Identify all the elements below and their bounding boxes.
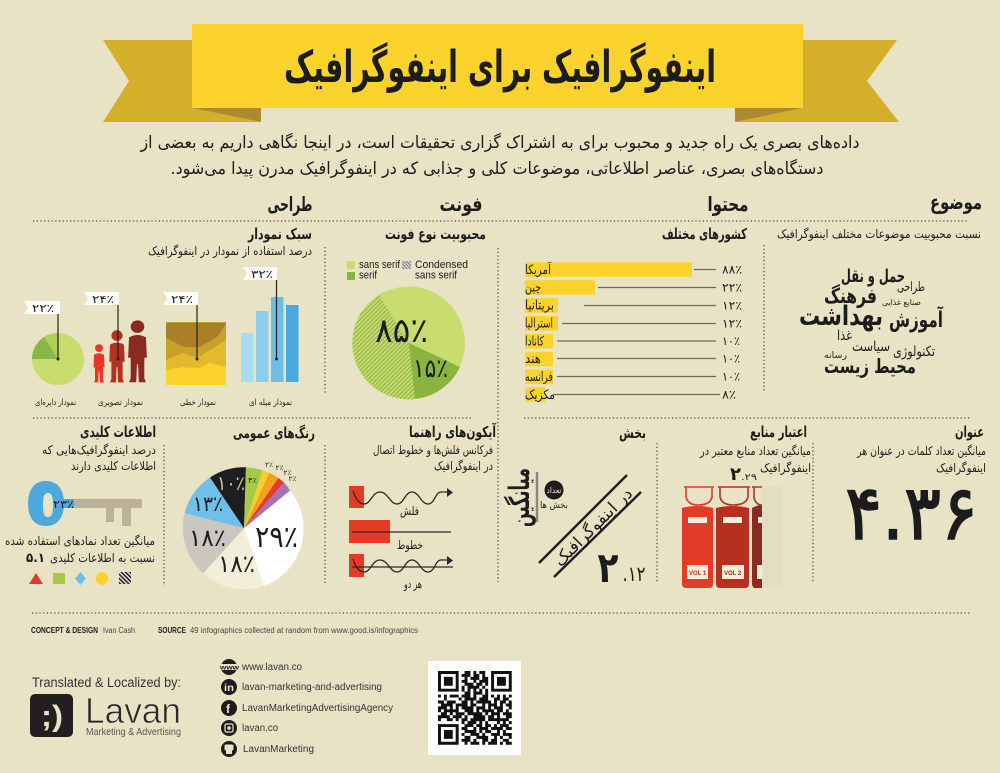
colours pie chart: ۱۸٪ (189, 524, 226, 552)
translator logo (30, 675, 181, 738)
title: اینفوگرافیک برای اینفوگرافیک (284, 41, 716, 93)
line example (349, 520, 451, 553)
font pie chart (352, 286, 465, 400)
website link (219, 659, 302, 675)
word cloud: صنایع غذایی (882, 298, 921, 307)
guide icons description: فرکانس فلش‌ها و خطوط اتصال (373, 443, 493, 458)
average symbols text: ۵.۱ (26, 551, 45, 566)
panel: chart style (24, 225, 312, 408)
intro paragraph: دستگاه‌های بصری، عناصر اطلاعاتی، موضوعات کلی و جذابی که در اینفوگرافیک مدرن پیدا می‌شود. (170, 158, 824, 179)
pictogram chart icon: ۲۴٪ (92, 293, 114, 306)
font pie chart: ۱۵٪ (413, 354, 448, 384)
panel: guide icons (349, 423, 497, 592)
font legend (347, 259, 468, 282)
country percentages: ۸٪ (722, 388, 736, 402)
area chart icon: ۲۴٪ (171, 293, 193, 306)
icon: books: VOL 1 (689, 571, 707, 577)
word cloud: بهداشت (799, 301, 883, 332)
font legend: serif (359, 270, 378, 282)
title banner (103, 24, 899, 122)
both example (349, 554, 453, 592)
rotated word average: میانگین (503, 468, 536, 527)
logo mark (30, 694, 73, 737)
title words description: اینفوگرافیک (936, 461, 986, 476)
colours pie chart: ۲٪ (265, 461, 273, 469)
translator logo: Translated & Localized by: (32, 675, 181, 690)
country percentages (722, 262, 742, 402)
bar chart icon: نمودار میله ای (249, 398, 292, 408)
word cloud: سیاست (852, 339, 890, 355)
heading: font: فونت (440, 192, 482, 216)
guide icons description: در اینفوگرافیک (434, 459, 493, 474)
colours pie chart: ۲۹٪ (255, 520, 298, 555)
sections heading: بخش (619, 424, 646, 442)
instagram link (221, 720, 278, 736)
country names: استرالیا (525, 316, 553, 332)
country percentages: ۲۲٪ (722, 280, 742, 294)
key information description: اطلاعات کلیدی دارند (71, 459, 156, 474)
heading: content: محتوا (708, 192, 748, 216)
panel: common colours (183, 424, 315, 589)
country percentages: ۱۲٪ (722, 316, 742, 330)
telegram bot link: LavanMarketing (243, 744, 314, 755)
average symbols text: نسبت به اطلاعات کلیدی (50, 551, 155, 565)
icon: key: ۲۳٪ (53, 498, 74, 511)
country percentages: ۱۰٪ (722, 334, 740, 348)
guide icons description (373, 443, 493, 474)
country names: آمریکا (525, 261, 552, 278)
title words description (856, 444, 986, 476)
country percentages: ۱۰٪ (722, 370, 740, 384)
country names: مکزیک (525, 388, 555, 403)
count badge: بخش ها (540, 501, 568, 511)
linkedin link: in (224, 683, 234, 694)
font pie chart: ۸۵٪ (375, 311, 428, 351)
word cloud: آموزش (889, 305, 943, 333)
title words heading: عنوان (955, 423, 984, 441)
colours pie chart: ۲٪ (288, 475, 297, 483)
instagram link: lavan.co (242, 723, 278, 734)
colours pie chart: ۴٪ (248, 476, 257, 485)
symbol shapes (29, 572, 131, 585)
bar chart icon (241, 267, 298, 408)
source credibility heading: اعتبار منابع (750, 423, 807, 441)
source credibility value: ۲ (730, 464, 741, 485)
panel: font popularity (347, 225, 486, 400)
colours pie chart: ۱۰٪ (217, 471, 245, 495)
average symbols text (5, 534, 155, 566)
bar chart icon: ۳۲٪ (251, 268, 273, 281)
QR code (428, 661, 521, 755)
translator logo: Marketing & Advertising (86, 726, 181, 738)
credits line: 49 infographics collected at random from www.good.is/infographics (190, 626, 418, 635)
source credibility value (730, 464, 757, 485)
font legend: sans serif (415, 270, 458, 282)
telegram bot link (221, 741, 314, 757)
pie chart icon: نمودار دایره‌ای (35, 398, 76, 408)
country percentages: ۱۲٪ (722, 298, 742, 312)
panel: countries bar chart (525, 225, 747, 403)
arrow example: فلش (400, 504, 419, 519)
facebook link: f (226, 702, 231, 716)
country percentages: ۸۸٪ (722, 262, 742, 276)
pictogram chart icon (84, 292, 147, 408)
font legend: Condensed (415, 259, 468, 271)
word cloud: غذا (837, 328, 852, 344)
source credibility description (699, 444, 811, 476)
area chart icon (163, 292, 226, 408)
both example: هر دو (403, 577, 422, 592)
social links (219, 659, 393, 757)
panel: key information (5, 423, 156, 585)
colours pie chart: ۱۳٪ (193, 492, 223, 516)
pie chart icon (24, 301, 84, 408)
facebook link: LavanMarketingAdvertisingAgency (242, 703, 393, 714)
country names: فرانسه (525, 370, 553, 385)
source credibility value: .۲۹ (741, 473, 757, 483)
sections value: .۱۲ (622, 562, 646, 586)
key information description (42, 443, 156, 474)
colours pie chart: ۱۸٪ (218, 550, 255, 578)
word cloud: محیط زیست (824, 354, 916, 378)
countries heading: کشورهای مختلف (662, 225, 747, 243)
translator logo: Lavan (85, 690, 181, 731)
colours heading: رنگ‌های عمومی (233, 424, 315, 442)
panel: title words (845, 423, 986, 557)
font popularity heading: محبوبیت نوع فونت (385, 225, 486, 243)
heading: subject: موضوع (930, 190, 982, 214)
country names: هند (525, 352, 541, 367)
font legend: sans serif (359, 259, 401, 271)
country names: بریتانیا (525, 298, 554, 314)
colours pie chart (183, 461, 304, 589)
panel: source credibility (682, 423, 811, 588)
icon: books (682, 486, 783, 588)
sections value: ۲ (598, 543, 619, 592)
icon: books: VOL 2 (724, 571, 742, 577)
word cloud (799, 266, 943, 378)
word cloud: تکنولوژی (893, 344, 935, 360)
website link: www (219, 664, 240, 672)
country names: چین (525, 280, 541, 296)
country names: کانادا (525, 334, 545, 350)
average symbols text: میانگین تعداد نمادهای استفاده شده (5, 534, 155, 549)
country bars (525, 262, 692, 402)
sections value (598, 543, 646, 592)
country percentages: ۱۰٪ (722, 352, 740, 366)
panel: sections (503, 424, 646, 592)
credits line (31, 626, 418, 635)
credits line: Ivan Cash (103, 626, 135, 635)
source credibility description: اینفوگرافیک (760, 461, 811, 476)
key information description: درصد اینفوگرافیک‌هایی که (42, 443, 156, 458)
intro paragraph (140, 132, 859, 179)
arrow example (349, 486, 453, 519)
heading: design: طراحی (268, 192, 312, 216)
area chart icon: نمودار خطی (180, 398, 216, 408)
logo mark: ;) (41, 700, 63, 733)
pictogram chart icon: نمودار تصویری (98, 398, 143, 408)
website link: www.lavan.co (241, 662, 302, 673)
linkedin link (221, 679, 382, 695)
source credibility description: میانگین تعداد منابع معتبر در (699, 444, 811, 459)
word cloud: حمل و نقل (841, 266, 905, 287)
facebook link (221, 700, 393, 716)
linkedin link: lavan-marketing-and-advertising (242, 682, 382, 693)
colours pie chart: ۲٪ (276, 464, 284, 472)
intro paragraph: داده‌های بصری یک راه جدید و محبوب برای به اشتراک گزاری تحقیقات است، در اینجا نگاهی داریم به بعضی از (140, 132, 859, 153)
credits line: SOURCE (158, 626, 187, 635)
diagonal label: در اینفوگرافیک (549, 483, 637, 571)
credits line: CONCEPT & DESIGN (31, 626, 98, 635)
guide icons heading: آیکون‌های راهنما (409, 423, 497, 441)
key information heading: اطلاعات کلیدی (80, 423, 156, 441)
panel: subject word cloud (777, 227, 981, 378)
chart style description: درصد استفاده از نمودار در اینفوگرافیک (148, 244, 312, 259)
country names (525, 261, 555, 403)
title words value: ۴.۳۶ (845, 468, 978, 557)
chart style heading: سبک نمودار (247, 225, 312, 243)
word cloud: فرهنگ (824, 283, 877, 308)
word cloud: طراحی (897, 280, 925, 295)
icon: key (28, 481, 142, 526)
count badge (540, 480, 568, 511)
count badge: تعداد (546, 486, 562, 495)
pie chart icon: ۲۲٪ (32, 302, 54, 315)
word cloud: رسانه (824, 351, 847, 361)
colours pie chart: ۲٪ (284, 469, 292, 477)
line example: خطوط (397, 538, 423, 553)
